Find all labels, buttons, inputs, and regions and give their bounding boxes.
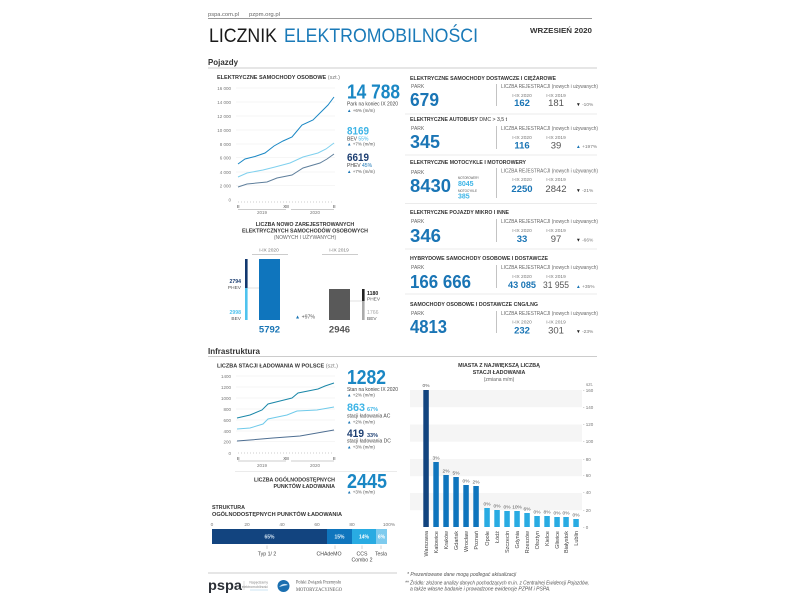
chart heading: STACJI ŁADOWANIA [473,370,525,376]
row: electric buses: PARK [411,126,425,132]
y axis: - 0 [583,525,589,530]
title [209,25,478,47]
city labels [424,530,580,556]
chart bands [410,390,582,510]
bar labels [258,546,387,564]
axis: 60 [314,522,320,528]
stat: PHEV [347,152,375,174]
bar percent labels: 2% [473,480,480,486]
chart heading [458,363,540,383]
row: micro vehicles [410,210,598,246]
title: LICZNIK [209,26,277,47]
chart title: ELEKTRYCZNE SAMOCHODY OSOBOWE (szt.) [217,75,340,81]
line chart: stations [221,374,336,468]
city labels: Szczecin [505,531,511,553]
logo: PSPA: pspa [208,578,243,593]
column 2019 [322,248,381,336]
column 2019: 2946 [329,324,350,336]
stat: PHEV: PHEV 45% [347,163,373,169]
row: vans and trucks: 181 [548,98,564,109]
row: motorcycles: MOTOROWERY [458,176,479,180]
city labels: Gdańsk [454,531,460,550]
stacked bar: 15% [334,534,345,540]
y axis: - 100 [583,439,594,444]
footnotes [405,572,589,592]
heading: Infrastruktura: Infrastruktura [208,346,260,356]
stat: public charging points: 2445 [347,471,387,493]
stat: PHEV: ▲ +7% (m/m) [347,169,375,174]
bar percent labels: 0% [484,502,491,508]
line chart: cars: II [237,204,240,209]
row: electric buses: I-IX 2020 [512,135,532,141]
row: CNG/LNG: SAMOCHODY OSOBOWE I DOSTAWCZE CNG/LNG [410,302,538,308]
row: micro vehicles: PARK [411,219,425,225]
row: hybrids [410,256,598,292]
axis [211,522,396,528]
bar labels: Combo 2 [351,558,373,564]
row: CNG/LNG: 301 [548,326,564,336]
stat: DC stations [347,428,391,450]
column 2020: 2794 [229,279,241,285]
line chart: cars: 2 000 [220,184,231,188]
bar percent labels: 5% [453,470,460,476]
city labels: Wrocław [464,531,470,552]
row: motorcycles: I-IX 2019 [546,177,566,183]
row: micro vehicles: 97 [551,234,561,245]
row: electric buses: I-IX 2019 [546,135,566,141]
column 2019: BEV [367,316,377,322]
column 2019: I-IX 2019 [329,248,349,254]
row: hybrids: 166 666 [410,272,471,292]
row: micro vehicles: 33 [517,234,527,245]
row: hybrids: I-IX 2019 [546,274,566,280]
bar percent labels: 0% [504,504,511,510]
comparison heading: (NOWYCH I UŻYWANYCH) [274,234,336,241]
row: CNG/LNG: ▼ -23% [576,329,594,335]
row: micro vehicles: ELEKTRYCZNE POJAZDY MIKRO I INNE [410,210,509,216]
city labels: Białystok [564,531,570,553]
stat: BEV: ▲ +7% (m/m) [347,142,375,146]
row: motorcycles: PARK [411,170,425,176]
row: hybrids: I-IX 2020 [512,274,532,280]
panel: newly registered cars comparison [228,222,381,336]
line chart: cars: 8 000 [220,142,231,147]
city labels: Lublin [574,531,580,546]
stat: AC stations: ▲ +2% (m/m) [347,420,375,424]
row: CNG/LNG: I-IX 2019 [546,320,566,326]
footnotes: * Prezentowane dane mogą podlegać aktualizacji [407,572,517,578]
line chart: stations: 0 [228,451,231,456]
row: vans and trucks: 162 [514,98,530,109]
logo: PSPA [208,578,268,593]
line chart: stations: 800 [223,407,231,412]
stat: total stations: 1282 [347,367,386,389]
line chart: cars: 12 000 [217,114,231,119]
column 2020: PHEV [228,285,242,291]
y axis: - 20 [583,508,591,513]
row: electric buses: ELEKTRYCZNE AUTOBUSY DMC > 3,5 t [410,117,508,123]
line chart: stations: II [237,456,240,461]
stat: DC stations: 33% [367,433,378,439]
city labels: Kielce [545,531,551,546]
line chart: cars: 16 000 [217,86,231,91]
panel: cities bar chart [410,363,594,556]
line chart: stations: 600 [223,418,231,423]
row: motorcycles: 8045 [458,181,474,188]
chart heading: (zmiana m/m) [484,377,515,383]
axis: 40 [279,522,285,528]
logo: PZPM [278,580,342,593]
line chart: cars: 2019 [257,210,268,215]
row: vans and trucks [410,75,598,110]
chart title: LICZBA STACJI ŁADOWANIA W POLSCE (szt.) [217,364,338,370]
public charging points label [254,476,335,490]
bar percent labels: 10% [512,504,523,510]
bar percent labels: 6% [524,506,531,512]
title: ELEKTROMOBILNOŚCI [284,25,478,47]
stat: AC stations: 863 [347,402,365,414]
city labels: Warszawa [424,530,430,556]
stat: DC stations: ▲ +3% (m/m) [347,444,375,450]
city labels: Olsztyn [535,531,541,549]
line chart: stations: 400 [223,429,231,434]
row: electric buses: 345 [410,132,440,152]
row: motorcycles: 2250 [511,184,533,195]
change percentage: ▲ +97% [295,314,315,320]
stacked bar: 65% [264,534,275,540]
line chart: stations: 1000 [221,396,231,401]
axis: 20 [244,522,250,528]
y axis: - 40 [583,490,591,495]
panel: electric passenger cars chart [217,75,340,215]
row: micro vehicles: I-IX 2019 [546,228,566,234]
bars [423,390,579,527]
row: electric buses: LICZBA REJESTRACJI (nowych i używanych) [501,126,598,132]
comparison heading: ELEKTRYCZNYCH SAMOCHODÓW OSOBOWYCH [242,226,368,234]
y axis: - 80 [583,457,591,462]
row: hybrids: ▲ +35% [576,284,595,290]
y axis: - 120 [583,422,594,427]
panel: charging stations chart [217,364,338,468]
bar labels: CHAdeMO [316,552,342,558]
row: CNG/LNG: I-IX 2020 [512,320,532,326]
stacked bar: 6% [378,534,386,540]
header links: pspa.com.pl [208,12,239,18]
logo: PZPM: Polski Związek Przemysłu [296,580,341,586]
line chart: cars: 2020 [310,210,321,215]
header links [208,12,280,18]
axis: 80 [349,522,355,528]
stat: BEV: 8169 [347,126,369,138]
chart heading: MIASTA Z NAJWIĘKSZĄ LICZBĄ [458,363,540,369]
row: hybrids: HYBRYDOWE SAMOCHODY OSOBOWE I DOSTAWCZE [410,256,548,262]
bar labels: Typ 1/ 2 [258,552,276,558]
row: motorcycles: ▼ -21% [576,188,594,194]
row: CNG/LNG: PARK [411,311,425,317]
y axis: - 60 [583,473,591,478]
bar percent labels [423,383,580,518]
column 2020: 5792 [259,324,280,336]
row: motorcycles: LICZBA REJESTRACJI (nowych i używanych) [501,168,598,174]
bar labels: Tesla [375,552,387,558]
stat: total cars [347,82,400,113]
row: motorcycles: ELEKTRYCZNE MOTOCYKLE I MOTOROWERY [410,160,526,166]
public charging points label: PUNKTÓW ŁADOWANIA [274,482,335,490]
line chart: cars: 14 000 [217,100,231,105]
row: CNG/LNG: 232 [514,326,530,336]
y axis [583,382,594,530]
bar percent labels: 3% [433,456,440,462]
row: vans and trucks: LICZBA REJESTRACJI (nowych i używanych) [501,84,598,90]
footnotes: a także własne badanie i prowadzone ewidencje PZPM i PSPA. [410,586,551,592]
bar percent labels: 0% [423,383,430,389]
line chart: stations: II [333,456,336,461]
logo: PSPA: Napędzamy [249,580,268,584]
stat: total cars: Park na koniec IX 2020 [347,102,398,108]
heading: Pojazdy: Pojazdy [208,57,238,67]
bar percent labels: 0% [554,510,561,516]
city labels: Katowice [434,531,440,553]
line chart: stations: XII [283,456,289,461]
stat: DC stations: stacji ładowania DC [347,438,391,444]
row: vans and trucks: ▼ -10% [576,102,594,108]
row: hybrids: LICZBA REJESTRACJI (nowych i używanych) [501,265,598,271]
city labels: Poznań [474,531,480,550]
stat: AC stations: stacji ładowania AC [347,414,391,420]
row: motorcycles: I-IX 2020 [512,177,532,183]
line chart: cars: XII [283,204,289,209]
row: motorcycles [410,160,598,200]
row: electric buses: ▲ +197% [576,144,598,150]
stacked bar [212,529,387,544]
column 2019: PHEV [367,296,381,302]
axis: 0 [211,522,214,528]
public charging points label: LICZBA OGÓLNODOSTĘPNYCH [254,476,335,484]
structure heading: OGÓLNODOSTĘPNYCH PUNKTÓW ŁADOWANIA [212,510,342,518]
stacked bar: 14% [359,534,370,540]
stat: total cars: ▲ +6% (m/m) [347,108,375,113]
bar labels: CCS [357,552,368,558]
stat: total stations: Stan na koniec IX 2020 [347,387,398,393]
line chart: cars: 0 [228,198,231,202]
bar percent labels: 2% [443,468,450,474]
line chart: cars: 10 000 [217,128,231,133]
column 2020: I-IX 2020 [259,248,279,254]
panel: vehicles right column [405,75,598,337]
line chart: cars: II [333,204,336,209]
comparison heading: LICZBA NOWO ZAREJESTROWANYCH [256,222,354,228]
row: vans and trucks: I-IX 2019 [546,93,566,99]
column 2020: BEV [231,316,242,322]
stat: PHEV: 6619 [347,152,369,164]
footnotes: ** Źródło: złożone analizy danych pochodzących m.in. z Centralnej Ewidencji Pojazdów, [405,580,589,586]
column 2020 [228,248,288,336]
date: WRZESIEŃ 2020 [530,26,592,35]
row: micro vehicles: ▼ -66% [576,238,594,244]
column 2019: 1180 [367,291,378,297]
comparison heading [242,222,368,241]
city labels: Opole [485,531,491,546]
line chart: stations: 2020 [310,463,321,468]
city labels: Gliwice [555,531,561,549]
logo: PZPM: MOTORYZACYJNEGO [296,588,342,593]
line chart: stations: 2019 [257,463,268,468]
row: CNG/LNG: 4813 [410,317,447,337]
row: micro vehicles: I-IX 2020 [512,228,532,234]
row: electric buses: 39 [551,140,561,152]
row: vans and trucks: PARK [411,84,425,90]
row: hybrids: 43 085 [508,280,537,291]
row: vans and trucks: ELEKTRYCZNE SAMOCHODY DOSTAWCZE I CIĘŻAROWE [410,75,556,82]
panel: structure of public charging points [211,505,396,564]
row: CNG/LNG [410,302,598,337]
y axis: - 160 [583,388,594,393]
stat: BEV: BEV 55% [347,136,369,142]
row: electric buses [410,117,598,152]
row: micro vehicles: LICZBA REJESTRACJI (nowych i używanych) [501,219,598,225]
bar percent labels: 0% [563,510,570,516]
bar percent labels: 0% [494,504,501,510]
row: motorcycles: 385 [458,194,470,200]
logo: PSPA: elektromobilność [242,585,268,589]
header links: pzpm.org.pl [249,12,280,18]
y axis: szt. [586,382,593,387]
row: electric buses: 116 [514,140,530,152]
structure heading: STRUKTURA [212,505,245,511]
line chart: cars: 4 000 [220,170,231,175]
stat: total stations [347,367,398,398]
row: vans and trucks: I-IX 2020 [512,93,532,99]
line chart: cars [217,86,336,215]
row: micro vehicles: 346 [410,226,441,246]
row: hybrids: PARK [411,265,425,271]
row: CNG/LNG: LICZBA REJESTRACJI (nowych i używanych) [501,311,598,317]
stat: BEV [347,126,375,146]
line chart: stations: 1400 [221,374,231,379]
bar percent labels: 0% [573,512,580,518]
axis: 100% [383,522,396,528]
row: motorcycles: 2842 [545,184,567,195]
row: motorcycles: MOTOCYKLE [458,189,477,193]
bar percent labels: 0% [463,478,470,484]
line chart: stations: 200 [223,440,231,444]
stat: total cars: 14 788 [347,82,400,104]
column 2020: 2998 [229,310,241,316]
row: hybrids: 31 955 [543,280,569,291]
city labels: Gdynia [515,530,521,548]
city labels: Kraków [444,531,450,549]
structure heading [212,505,342,518]
y axis: - 140 [583,405,594,410]
stat: AC stations [347,402,391,424]
row: motorcycles: 8430 [410,176,451,196]
column 2019: 1766 [367,310,379,316]
city labels: Rzeszów [525,531,531,553]
line chart: cars: 6 000 [220,156,231,160]
bar percent labels: 8% [544,510,551,516]
bar percent labels: 0% [534,510,541,516]
stat: public charging points: ▲ +3% (m/m) [347,490,375,494]
line chart: stations: 1200 [221,385,231,390]
stat: DC stations: 419 [347,428,364,440]
stat: AC stations: 67% [367,407,378,413]
stat: total stations: ▲ +2% (m/m) [347,392,375,398]
city labels: Łódź [495,531,501,543]
row: vans and trucks: 679 [410,90,439,110]
